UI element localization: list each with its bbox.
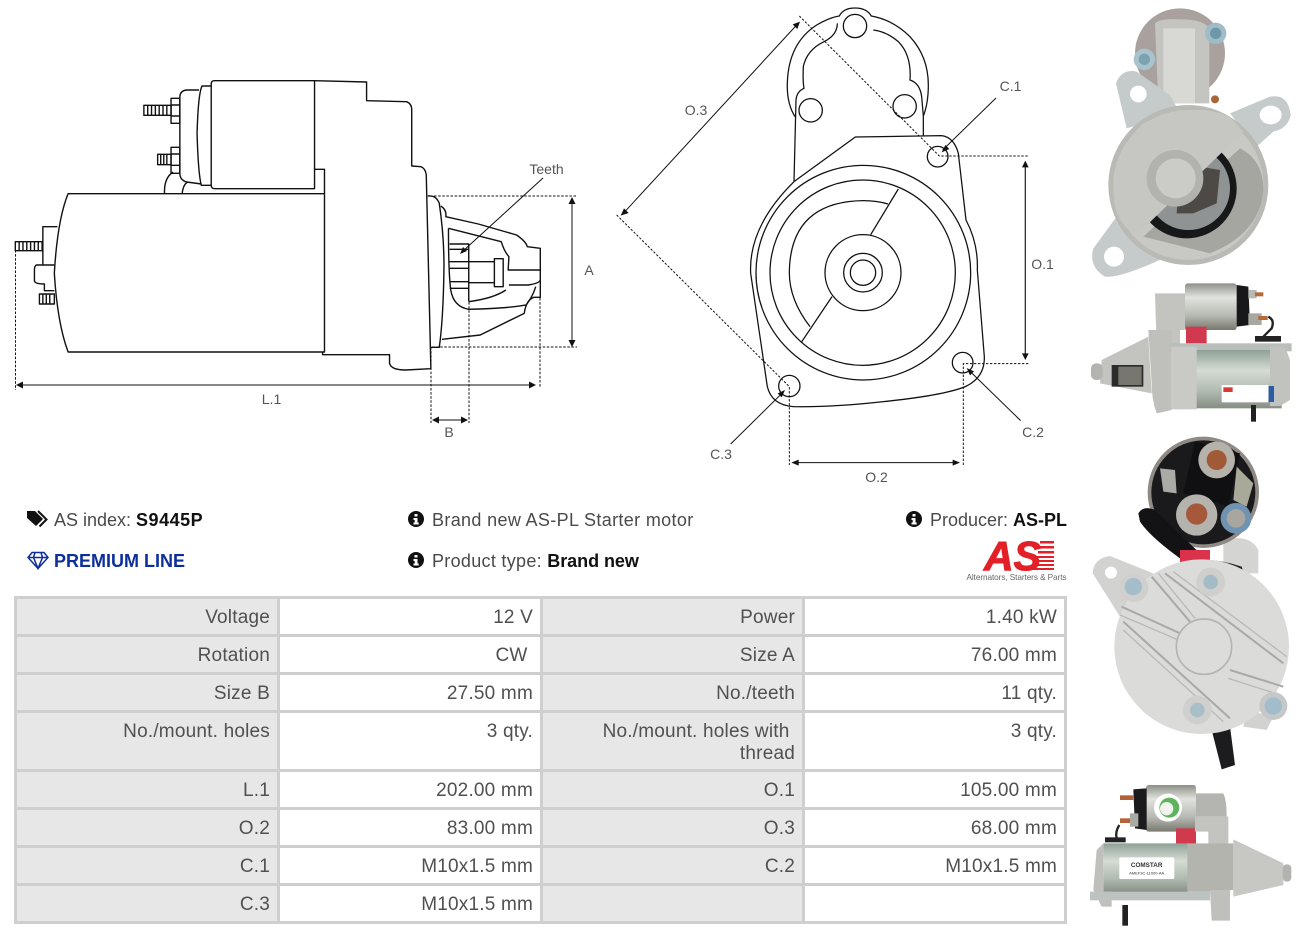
photo: starter side view — [1091, 283, 1292, 422]
icon: info — [408, 511, 424, 527]
front view technical drawing — [616, 7, 1054, 485]
icon: diamond — [27, 552, 49, 570]
specification table: C.1 — [240, 856, 270, 877]
dimension labels: C.2 — [1022, 424, 1044, 440]
product type line: Product type: Brand new — [432, 551, 639, 571]
specification table: Voltage — [205, 607, 270, 628]
specification table: 1.40 kW — [986, 607, 1057, 628]
AS-PL logo: Alternators, Starters & Parts — [966, 573, 1066, 582]
dimension labels: A — [584, 262, 594, 278]
dimension labels: B — [444, 424, 454, 440]
description line: Brand new AS-PL Starter motor — [432, 510, 694, 530]
specification table: Power — [740, 607, 795, 628]
specification table: 11 qty. — [1001, 683, 1057, 704]
specification table: Size A — [740, 645, 795, 666]
specification table: CW — [495, 645, 528, 666]
specification table — [14, 596, 1067, 924]
side view technical drawing — [14, 80, 594, 440]
specification table: M10x1.5 mm — [421, 894, 533, 915]
dimension labels: O.3 — [685, 102, 707, 118]
specification table: O.3 — [764, 818, 795, 839]
specification table: L.1 — [243, 780, 270, 801]
specification table: No./mount. holes with — [603, 721, 790, 742]
specification table: 27.50 mm — [447, 683, 533, 704]
photo: starter front end — [1092, 8, 1291, 277]
specification table: 12 V — [493, 607, 533, 628]
specification table: thread — [740, 743, 795, 764]
icon: info — [408, 552, 424, 568]
dimension labels: C.3 — [710, 446, 732, 462]
product photos: solenoid end and side — [1090, 436, 1292, 926]
specification table: No./mount. holes — [123, 721, 270, 742]
dimension labels — [685, 78, 1054, 485]
product photos: front end and side — [1091, 8, 1292, 422]
specification table: 202.00 mm — [436, 780, 533, 801]
flange outline — [751, 8, 984, 407]
specification table: Size B — [214, 683, 270, 704]
specification table: 83.00 mm — [447, 818, 533, 839]
premium line badge: PREMIUM LINE — [54, 551, 185, 571]
specification table: M10x1.5 mm — [421, 856, 533, 877]
specification table: C.2 — [765, 856, 795, 877]
icon: info — [906, 511, 922, 527]
photo: starter side view with label: COMSTAR — [1131, 862, 1163, 869]
dimension lines O.1, O.2, O.3 and callout leaders — [617, 16, 1028, 465]
dimension labels: Teeth — [529, 161, 564, 177]
specification table: 76.00 mm — [971, 645, 1057, 666]
dimension labels: L.1 — [262, 391, 281, 407]
specification table: 105.00 mm — [960, 780, 1057, 801]
producer line: Producer: AS-PL — [930, 510, 1067, 530]
specification table: 68.00 mm — [971, 818, 1057, 839]
specification table: 3 qty. — [1011, 721, 1057, 742]
starter motor outline — [15, 81, 540, 370]
photo: starter rear end — [1093, 437, 1289, 769]
specification table: Rotation — [198, 645, 270, 666]
dimension labels: O.2 — [865, 469, 888, 485]
icon: tags — [27, 510, 48, 528]
photo: starter side view with label: AMEF3C-11000-AA — [1129, 870, 1165, 875]
AS index line: AS index: S9445P — [54, 510, 203, 530]
specification table: 3 qty. — [487, 721, 533, 742]
specification table: No./teeth — [716, 683, 795, 704]
specification table: O.2 — [239, 818, 270, 839]
dimension labels: C.1 — [1000, 78, 1022, 94]
dimension labels — [262, 161, 594, 440]
specification table: C.3 — [240, 894, 270, 915]
specification table: M10x1.5 mm — [945, 856, 1057, 877]
specification table: O.1 — [764, 780, 795, 801]
dimension lines L.1, A, B, teeth leader — [16, 178, 577, 423]
AS-PL logo — [966, 538, 1066, 582]
photo: starter side view with label — [1090, 785, 1291, 926]
dimension labels: O.1 — [1031, 256, 1054, 272]
